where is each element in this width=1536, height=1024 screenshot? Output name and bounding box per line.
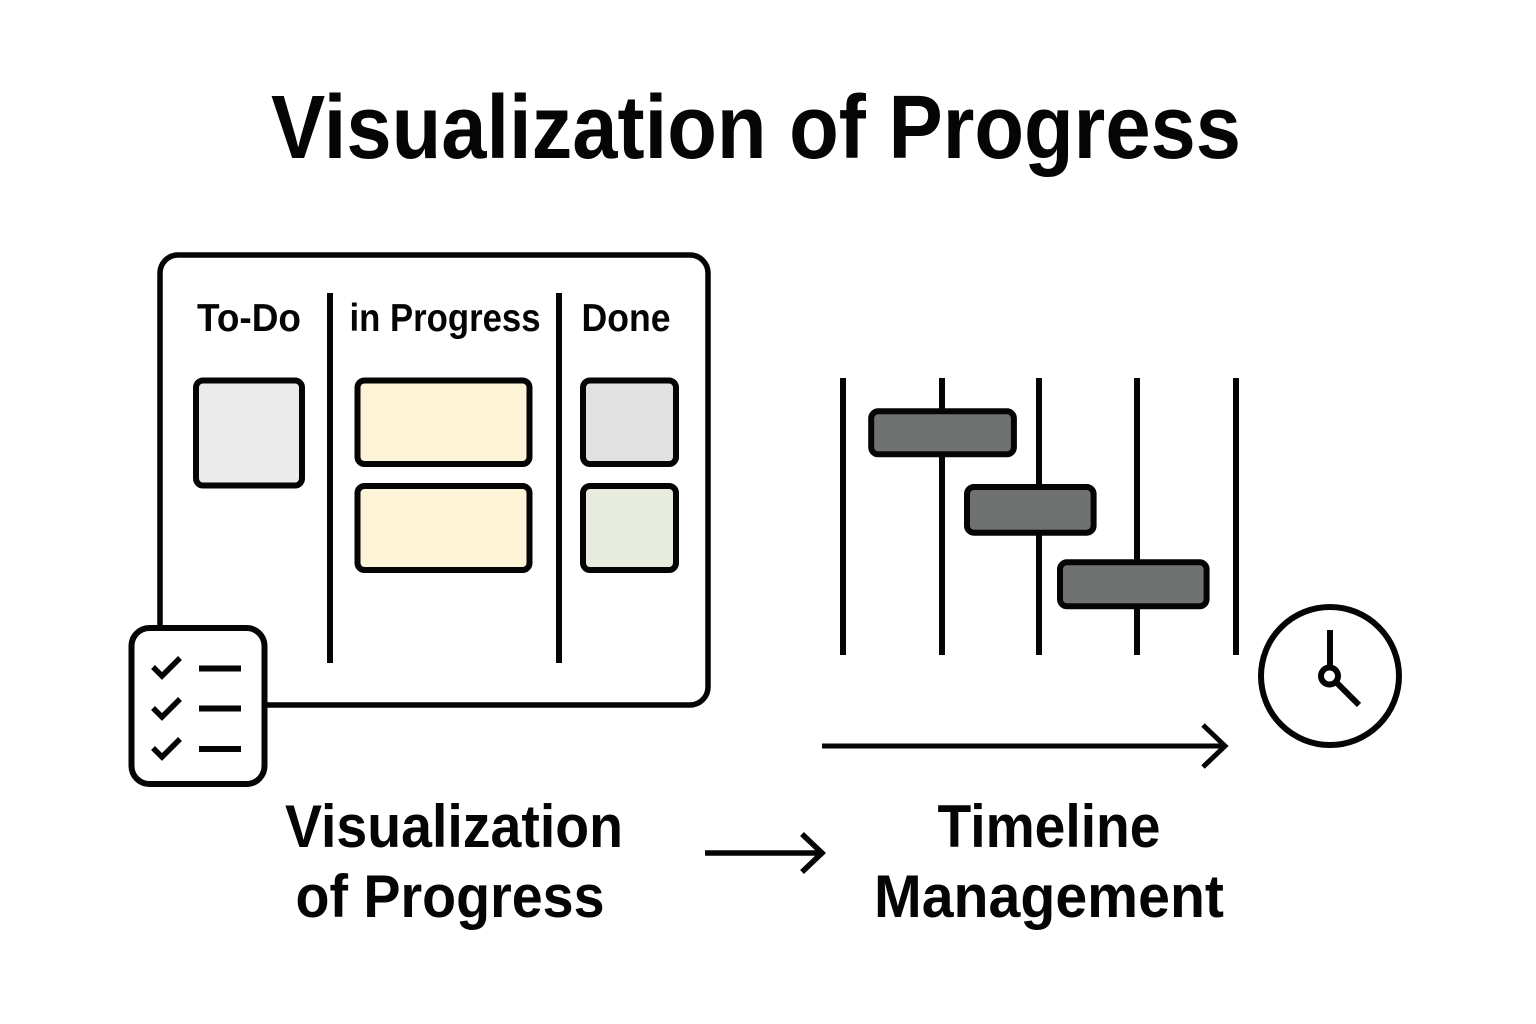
gantt bar 2 (967, 487, 1094, 533)
arrow: timeline (822, 725, 1225, 767)
label: timeline management: Timeline (938, 793, 1160, 860)
card: done 2 (583, 486, 676, 570)
arrow: between labels (705, 834, 822, 872)
column divider right (556, 293, 562, 663)
label: timeline management (874, 793, 1224, 930)
heading: Done: Done (582, 297, 670, 340)
gantt bar 3 (1060, 562, 1207, 606)
label: visualization of progress (285, 793, 623, 930)
icon: clock (1261, 607, 1399, 745)
label: visualization of progress: of Progress (296, 863, 604, 930)
heading: in Progress: in Progress (350, 297, 540, 340)
panel: kanban board (160, 255, 708, 705)
card: to-do (196, 380, 302, 486)
card: done 1 (583, 380, 676, 464)
title: Visualization of Progress (271, 78, 1241, 178)
label: timeline management: Management (874, 863, 1224, 930)
gantt bar 1 (871, 411, 1014, 454)
column divider left (327, 293, 333, 663)
heading: To-Do: To-Do (197, 297, 301, 340)
card: in progress 1 (358, 380, 530, 464)
label: visualization of progress: Visualization (285, 793, 623, 860)
card: in progress 2 (358, 486, 530, 570)
icon: checklist (132, 628, 264, 784)
chart: gantt timeline (843, 378, 1236, 655)
